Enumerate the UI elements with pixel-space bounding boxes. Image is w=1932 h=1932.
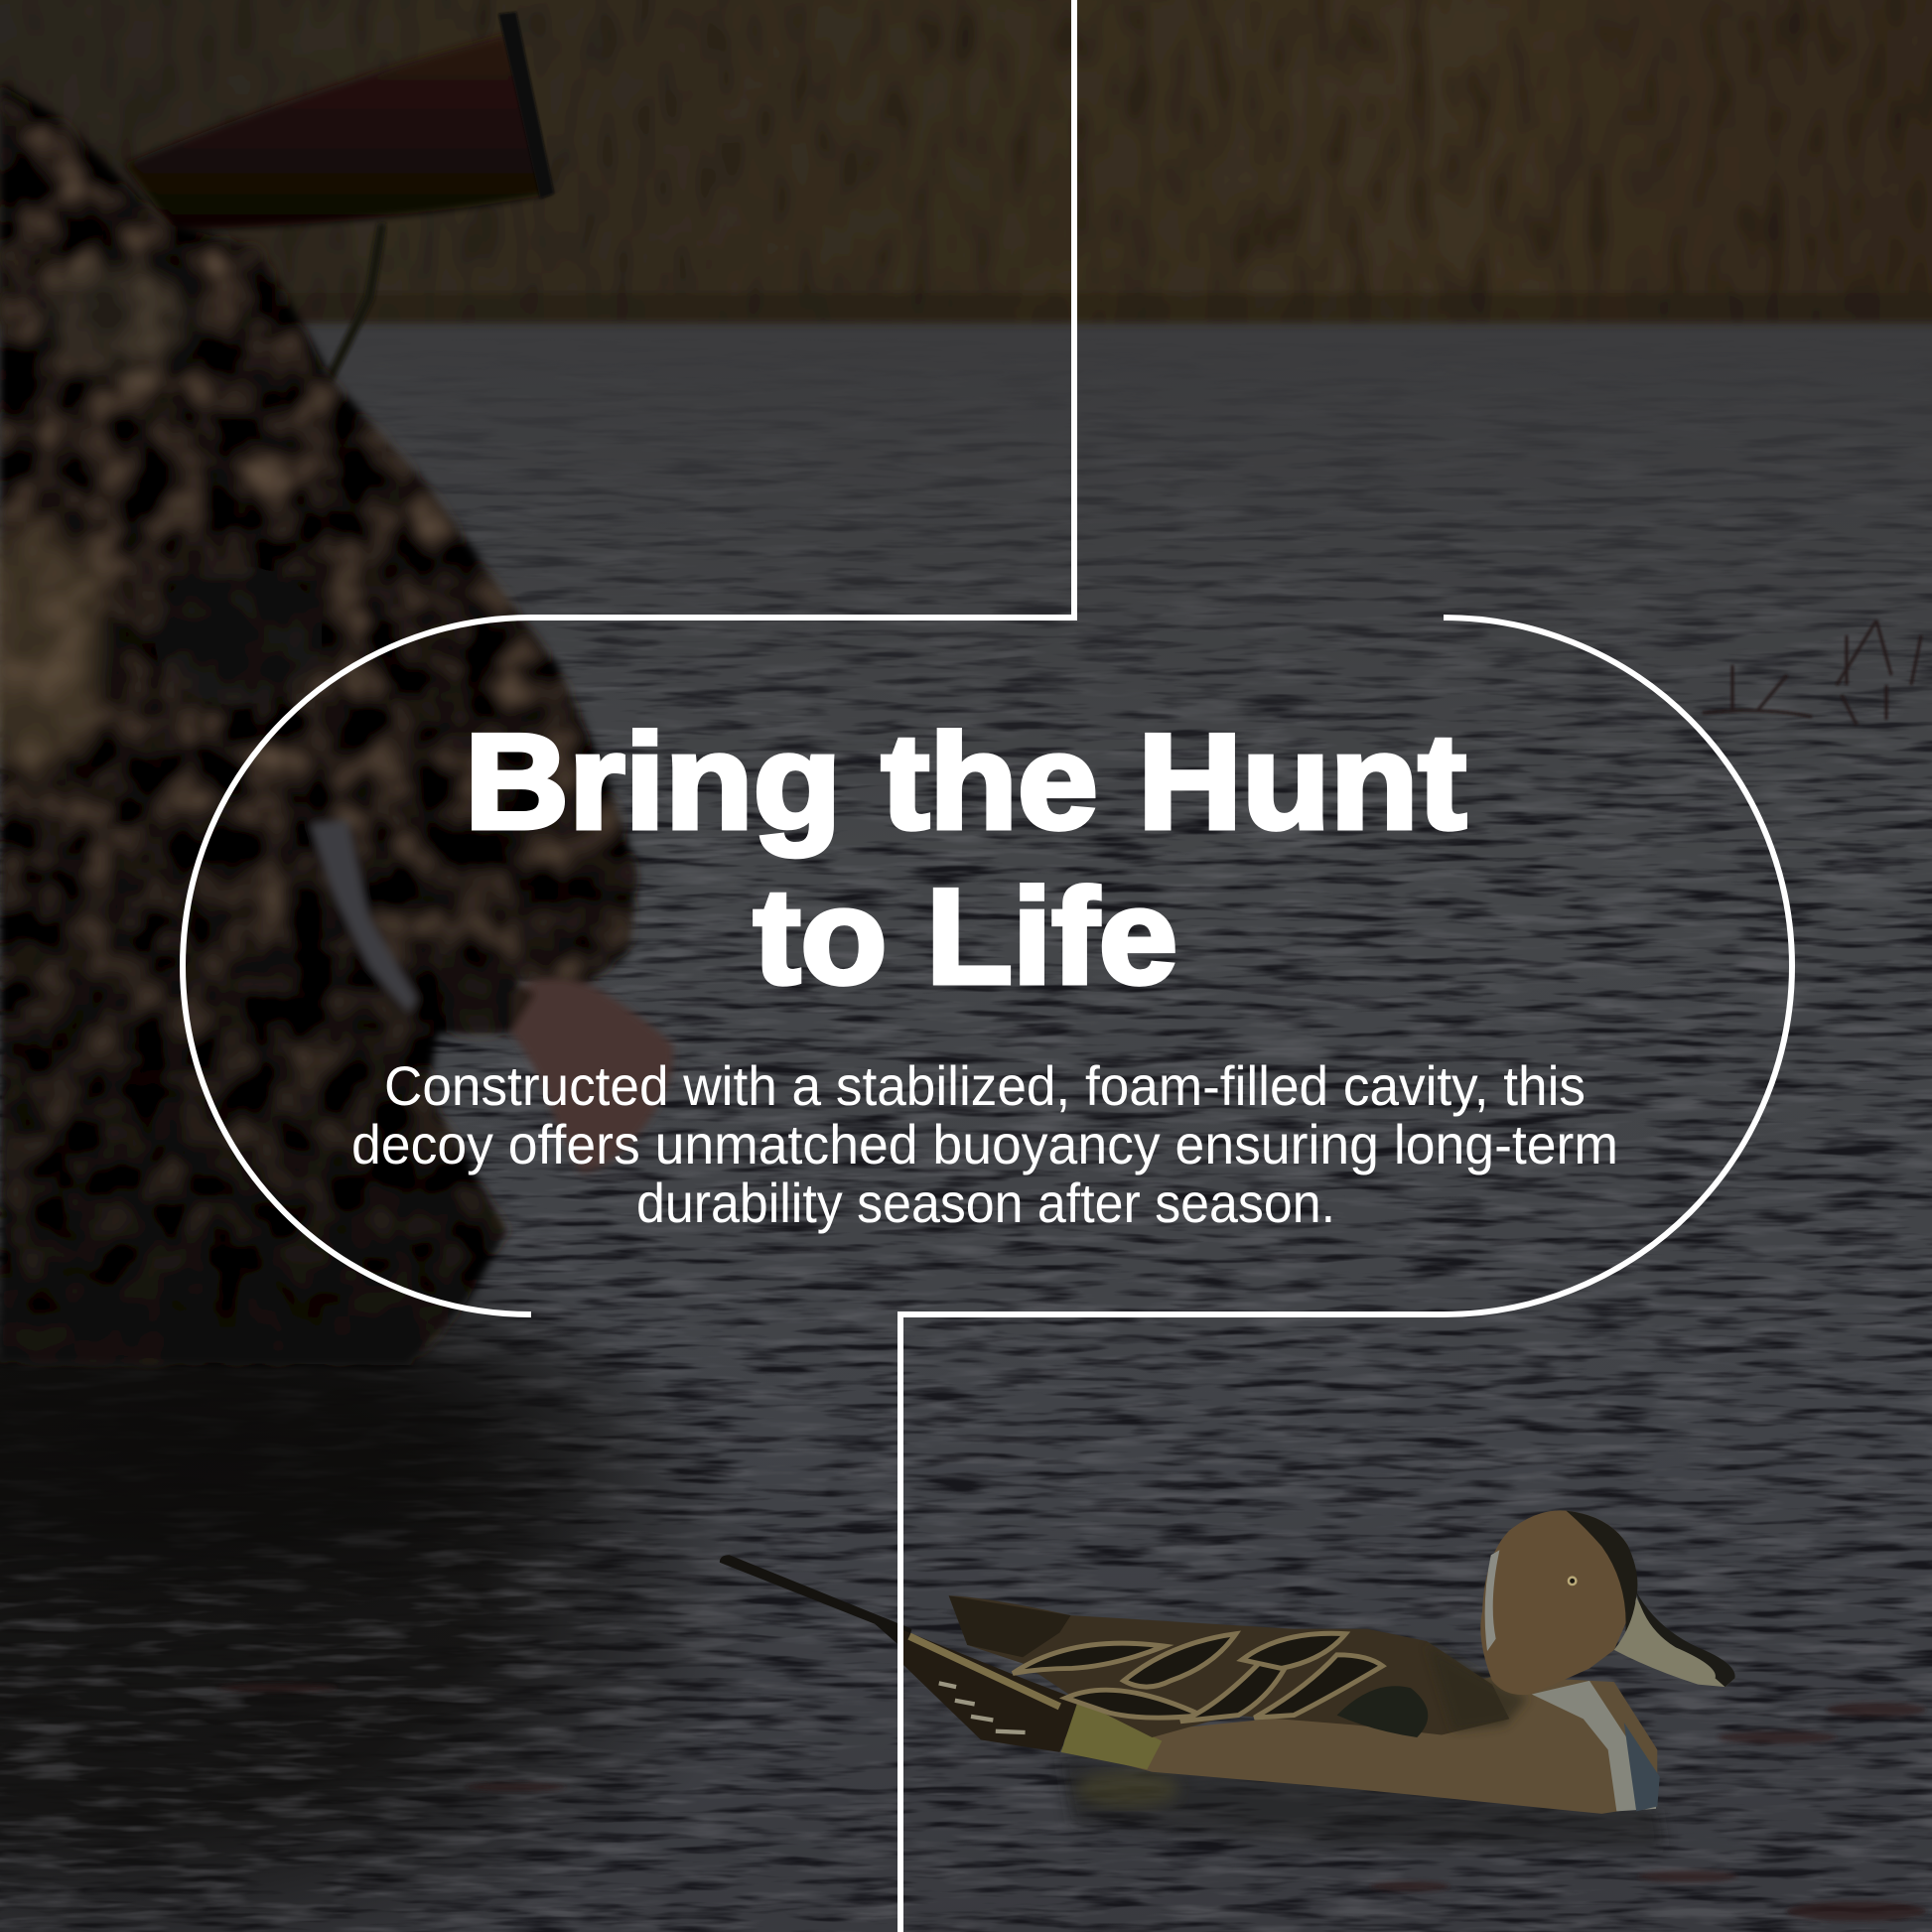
hunter base shape	[0, 84, 637, 1365]
duck yellow flank patch	[1061, 1701, 1162, 1769]
dark reflection of hunter	[0, 1172, 764, 1932]
downward shading on hunter	[0, 84, 637, 1365]
duck bill	[1614, 1596, 1735, 1687]
lit camo patch on shoulder	[40, 258, 199, 377]
lit camo patch on back	[0, 521, 109, 769]
duck rear quarter	[897, 1627, 1080, 1752]
frame line: upper segment with rounded left end	[183, 0, 1074, 1314]
duck wing plumage	[949, 1595, 1509, 1737]
duck neck shadow	[1427, 1645, 1528, 1731]
duck lower body	[1057, 1676, 1657, 1814]
rifle stock	[124, 12, 554, 382]
title: Bring the Hunt	[465, 706, 1466, 857]
bank reeds in water	[1703, 621, 1921, 725]
dark folds on jacket	[154, 566, 323, 705]
body text: decoy offers unmatched buoyancy ensuring long-term	[351, 1113, 1618, 1175]
duck feather blades	[1013, 1633, 1383, 1722]
hunter in camouflage	[0, 84, 673, 1365]
duck tail spike	[720, 1555, 911, 1651]
duck chest white	[1532, 1681, 1657, 1811]
body text	[351, 1054, 1618, 1234]
sleeve shadow	[442, 953, 536, 1033]
duck decoy	[720, 1510, 1735, 1849]
deep shadow under hunter	[0, 1251, 685, 1628]
duck eye	[1568, 1576, 1578, 1586]
title	[465, 706, 1466, 1012]
duck reflection patch	[1075, 1770, 1179, 1808]
camouflage pattern	[0, 84, 637, 1365]
reddish water reflections	[218, 1684, 1926, 1921]
hunter hand	[511, 979, 673, 1173]
reed bank	[0, 0, 1932, 324]
body text: durability season after season.	[636, 1172, 1335, 1234]
title: to Life	[754, 861, 1177, 1012]
light ripples	[0, 536, 1932, 1932]
duck head	[1480, 1510, 1635, 1695]
water gap between arm and body	[310, 820, 417, 1013]
body text: Constructed with a stabilized, foam-filled cavity, this	[384, 1054, 1586, 1117]
frame line: lower segment with rounded right end	[900, 618, 1792, 1932]
duck wing speculum	[1337, 1686, 1428, 1737]
duck shadow on water	[1059, 1756, 1663, 1849]
